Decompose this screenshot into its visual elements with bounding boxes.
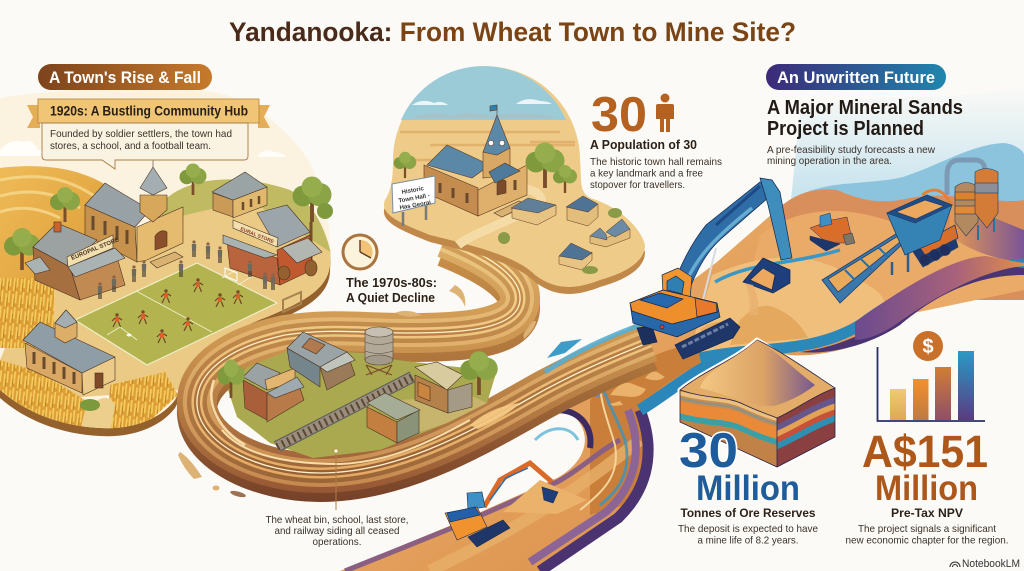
water tank — [365, 327, 393, 375]
text: tonnes of ore reserves: a mine life of 8.2 years. — [698, 534, 798, 546]
title: Yandanooka: From Wheat Town to Mine Site? — [229, 17, 796, 47]
excavator arm — [672, 178, 792, 300]
icon: clock — [342, 234, 378, 270]
sky — [401, 66, 566, 120]
splashes around road — [178, 285, 536, 498]
callout: founding text — [42, 123, 248, 169]
derelict shed — [367, 393, 420, 443]
railway — [274, 372, 416, 451]
Europal store — [25, 222, 125, 300]
grey shed — [287, 332, 355, 390]
pale sky — [790, 85, 1024, 210]
text: town hall landmark: stopover for travellers. — [590, 179, 685, 191]
text: pre-tax npv: Pre-Tax NPV — [891, 506, 963, 520]
panel: lower road — [340, 143, 1024, 571]
stat: 30 million: 30 — [679, 424, 738, 478]
tracks — [637, 326, 657, 345]
bar chart — [878, 331, 985, 421]
stat: population number: 30 — [591, 88, 647, 142]
text: pre-feasibility: mining operation in the area. — [767, 155, 892, 167]
sign: historic town hall: Town Hall - — [398, 193, 430, 205]
blue streak and triangle — [545, 325, 640, 372]
timber store — [415, 362, 472, 413]
heading: population: A Population of 30 — [590, 137, 697, 152]
stat: A$151 million — [862, 426, 988, 508]
large excavator — [630, 178, 792, 359]
trees — [394, 142, 577, 193]
callout: founding text: stores, a school, and a football team. — [50, 140, 211, 152]
ore block — [675, 340, 840, 470]
trees — [4, 164, 333, 270]
text: tonnes of ore reserves: The deposit is expected to have — [678, 523, 818, 535]
text: town hall landmark: The historic town hall remains — [590, 156, 722, 168]
callout leader line — [334, 449, 338, 510]
body — [630, 290, 720, 337]
players — [112, 278, 243, 343]
text: town hall landmark: a key landmark and a free — [590, 168, 703, 180]
sign: historic town hall: Historic — [401, 186, 425, 196]
bucket and sand — [743, 258, 790, 315]
conveyor and hopper — [822, 195, 958, 303]
stat: A$151 million: A$151 — [862, 426, 988, 477]
road: winding timeline — [197, 238, 650, 482]
plant: silos and pipes — [922, 160, 998, 240]
spectators — [98, 240, 301, 312]
banner: 1920s heading: 1920s: A Bustling Community Hub — [50, 104, 248, 118]
green ground — [228, 350, 497, 458]
pill: An Unwritten Future: An Unwritten Future — [777, 69, 935, 87]
cottages — [498, 196, 630, 274]
panel: hall island — [384, 66, 645, 294]
distant hills — [800, 143, 1024, 240]
island rim — [384, 74, 645, 294]
sign: historic town hall — [392, 176, 435, 226]
foreground dune — [855, 256, 1024, 340]
text: ceased operations: operations. — [312, 536, 362, 548]
terrain base — [340, 143, 1024, 571]
heading: mineral sands project: Project is Planned — [767, 118, 924, 140]
icon: dollar coin: $ — [922, 336, 934, 358]
text: tonnes of ore reserves — [678, 506, 818, 546]
track band under excavator — [590, 342, 725, 515]
banner: 1920s heading — [27, 99, 270, 128]
lower road bands — [345, 350, 760, 571]
rivers — [715, 250, 840, 282]
stat: 30 million — [679, 424, 800, 508]
text: pre-tax npv: The project signals a significant — [858, 523, 996, 535]
trees — [218, 351, 498, 398]
panel: 1920s town scene — [0, 85, 340, 436]
town hall — [85, 157, 183, 268]
cab — [662, 268, 692, 299]
pill: An Unwritten Future — [766, 64, 946, 90]
land rim — [0, 96, 330, 436]
abandoned store — [243, 363, 304, 422]
icon: person — [656, 94, 674, 132]
sand mounds — [610, 372, 665, 406]
heading: mineral sands project: A Major Mineral Sands — [767, 97, 963, 119]
text: tonnes of ore reserves: Tonnes of Ore Reserves — [680, 506, 816, 520]
sand piles — [700, 306, 808, 345]
general store: EURAL STORE — [239, 226, 275, 245]
text: pre-tax npv — [846, 506, 1008, 546]
sign: historic town hall: Has Georai — [399, 200, 432, 211]
heading: 1970s decline: A Quiet Decline — [346, 291, 435, 305]
town hall — [424, 105, 527, 217]
heading: 1970s decline: The 1970s-80s: — [346, 276, 437, 290]
stat: A$151 million: Million — [875, 469, 978, 508]
stat: 30 million: Million — [696, 469, 800, 508]
text: pre-feasibility: A pre-feasibility study forecasts a new — [767, 144, 935, 156]
football field — [75, 263, 277, 365]
Europal store: EUROPAL STORE — [71, 237, 120, 262]
back building — [212, 172, 267, 218]
callout: founding text: Founded by soldier settlers, the town had — [50, 128, 232, 140]
pill: A Town's Rise & Fall: A Town's Rise & Fall — [49, 69, 201, 87]
land surface — [0, 85, 340, 435]
hall road — [458, 188, 541, 245]
watermark: NotebookLM: NotebookLM — [962, 558, 1020, 570]
small excavator — [445, 463, 587, 547]
school — [23, 310, 115, 411]
text: pre-tax npv: new economic chapter for the region. — [846, 534, 1008, 546]
panel: 1970s abandoned town — [218, 327, 498, 458]
pill: A Town's Rise & Fall — [38, 64, 212, 90]
text: ceased operations: and railway siding all ceased — [274, 525, 400, 537]
small dozer — [810, 213, 855, 251]
text: ceased operations: The wheat bin, school, last store, — [266, 514, 408, 526]
island ground — [384, 67, 645, 287]
general store — [223, 205, 322, 285]
panel: mining landscape — [690, 85, 1024, 358]
